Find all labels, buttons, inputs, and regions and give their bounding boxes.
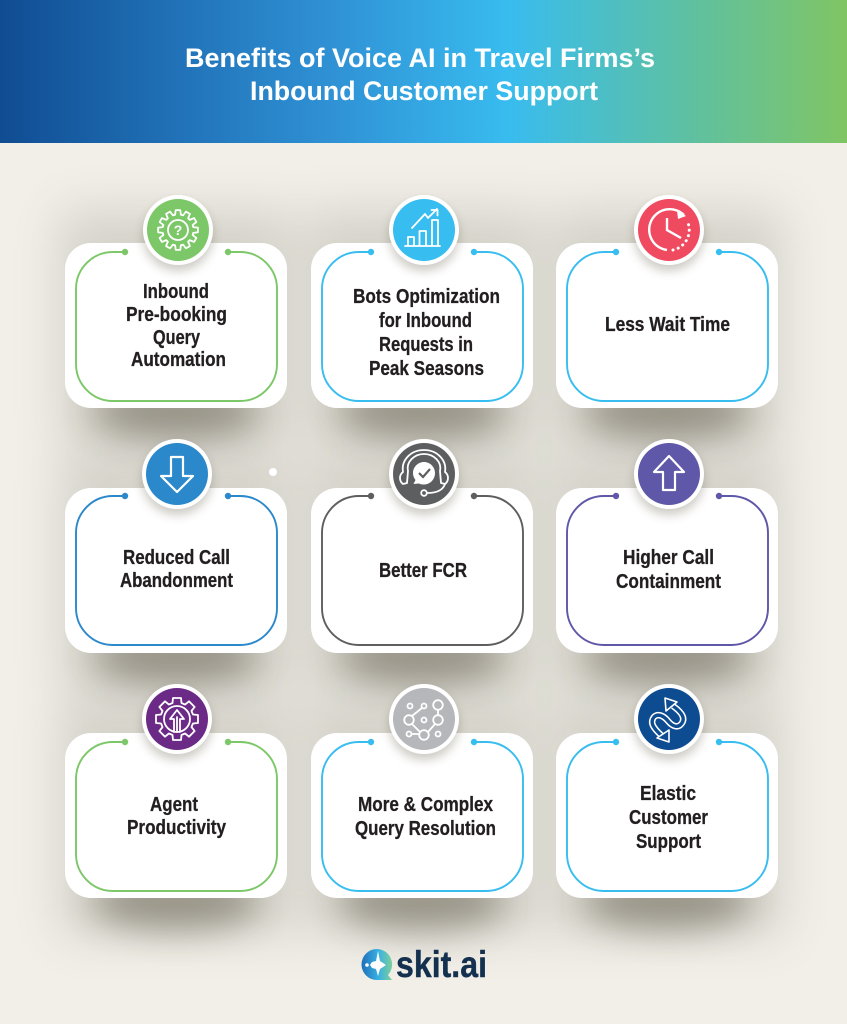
heading: Less Wait Time bbox=[605, 314, 730, 336]
heading: Pre-booking bbox=[126, 304, 227, 326]
icon: gear with up arrow bbox=[142, 684, 212, 760]
wide soft card shadows bbox=[60, 210, 783, 935]
decorative white dot bbox=[269, 468, 277, 476]
icon: down arrow bbox=[142, 439, 212, 515]
heading: Inbound bbox=[143, 281, 209, 303]
heading bbox=[127, 794, 227, 839]
panel: Agent Productivity bbox=[65, 684, 287, 898]
panel: More & Complex Query Resolution bbox=[311, 684, 533, 898]
panel: Inbound Pre-booking Query Automation bbox=[65, 195, 287, 408]
panel: Less Wait Time bbox=[556, 195, 778, 408]
wordmark: skit.ai bbox=[396, 944, 487, 985]
heading: Higher Call bbox=[623, 547, 714, 569]
heading: Productivity bbox=[127, 817, 227, 839]
icon: network nodes bbox=[389, 684, 459, 760]
heading: Reduced Call bbox=[123, 547, 230, 569]
heading: Automation bbox=[131, 349, 226, 371]
heading: Abandonment bbox=[120, 570, 233, 592]
heading: Query Resolution bbox=[355, 818, 496, 840]
icon: logo speech bubble bbox=[362, 949, 392, 980]
panel: Bots Optimization bbox=[311, 195, 533, 408]
icon: gear with question mark bbox=[143, 195, 213, 271]
icon: s-curve arrows bbox=[634, 684, 704, 760]
heading: for Inbound bbox=[379, 310, 472, 332]
heading: Peak Seasons bbox=[369, 358, 484, 380]
heading bbox=[616, 547, 721, 593]
panel: Higher Call Containment bbox=[556, 439, 778, 653]
heading bbox=[355, 794, 496, 840]
logo: skit.ai bbox=[362, 944, 487, 985]
heading: Query bbox=[153, 327, 201, 349]
heading: Agent bbox=[150, 794, 198, 816]
icon: headset with check bbox=[389, 439, 459, 515]
panel: Reduced Call Abandonment bbox=[65, 439, 287, 653]
title: Inbound Customer Support bbox=[250, 76, 598, 106]
heading: Bots Optimization bbox=[353, 286, 500, 308]
heading: Containment bbox=[616, 571, 721, 593]
heading: Better FCR bbox=[379, 560, 467, 582]
title: Benefits of Voice AI in Travel Firms’s bbox=[185, 43, 655, 73]
heading: Elastic bbox=[640, 783, 696, 805]
heading: Customer bbox=[629, 807, 708, 829]
title bbox=[185, 43, 655, 106]
panel: Elastic Customer Support bbox=[556, 684, 778, 898]
icon: gear with question mark: ? bbox=[174, 222, 182, 238]
header banner bbox=[0, 0, 847, 143]
icon: growth chart bbox=[389, 195, 459, 271]
heading bbox=[353, 286, 500, 380]
icon: clock bbox=[634, 195, 704, 271]
panel: Better FCR bbox=[311, 439, 533, 653]
strong shadows beneath cards bbox=[92, 384, 751, 930]
heading bbox=[120, 547, 233, 592]
heading: Support bbox=[636, 831, 701, 853]
heading bbox=[126, 281, 227, 371]
heading: More & Complex bbox=[358, 794, 493, 816]
icon: up arrow bbox=[634, 439, 704, 515]
heading: Requests in bbox=[379, 334, 473, 356]
heading bbox=[629, 783, 708, 853]
